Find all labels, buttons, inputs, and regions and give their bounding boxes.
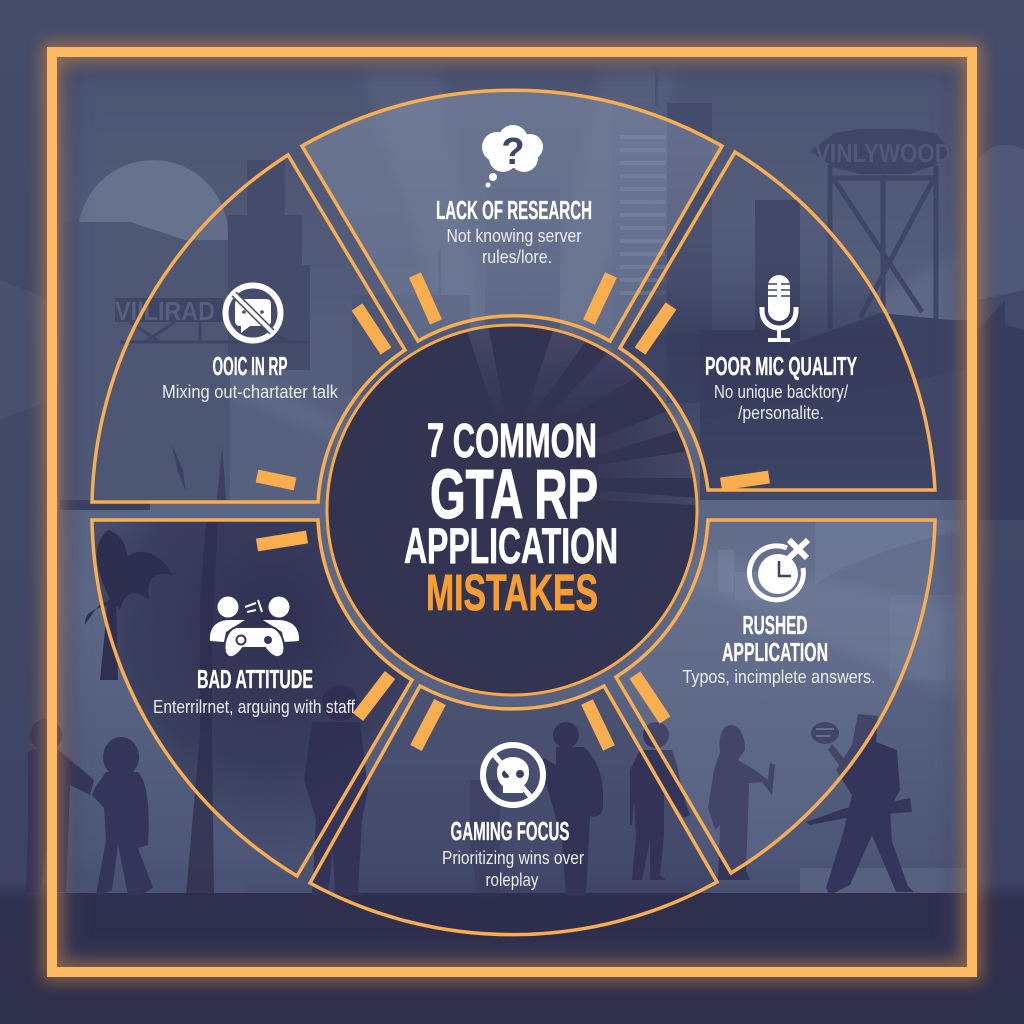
inner vignette xyxy=(57,57,967,967)
icon: question cloud xyxy=(482,125,543,188)
icon: microphone xyxy=(762,275,796,341)
description xyxy=(714,382,848,423)
panel: poor mic quality xyxy=(620,152,935,490)
person: backpack xyxy=(538,722,603,895)
left billboard: VIILIRAD xyxy=(115,296,215,326)
heading: OOIC IN RP xyxy=(212,351,288,381)
panel: ooic in rp xyxy=(92,155,405,502)
icon: clock with x xyxy=(749,540,808,600)
left billboard xyxy=(115,298,286,344)
heading: BAD ATTITUDE xyxy=(197,664,313,694)
title: MISTAKES xyxy=(426,564,598,621)
person: child xyxy=(92,737,153,895)
building right xyxy=(755,200,800,340)
description: Enterrilrnet, arguing with staff xyxy=(153,697,356,717)
tower xyxy=(620,76,712,403)
right lower scenery xyxy=(718,520,950,574)
palm trees xyxy=(85,530,172,680)
hill behind sun xyxy=(60,222,230,500)
segment: ooic in rp xyxy=(162,286,339,402)
person: figure behind skull xyxy=(470,780,500,897)
title xyxy=(404,414,618,621)
street lamp xyxy=(186,520,218,895)
hills right xyxy=(700,313,967,500)
description xyxy=(446,226,582,267)
center circle xyxy=(327,325,697,695)
heading: APPLICATION xyxy=(722,637,828,667)
vinewood sign xyxy=(810,129,952,330)
speech bubble xyxy=(811,722,852,774)
panels xyxy=(92,90,935,935)
description: roleplay xyxy=(486,870,538,890)
heading: GAMING FOCUS xyxy=(450,816,570,846)
segment: lack of research xyxy=(436,125,592,267)
icon: question cloud: ? xyxy=(501,131,525,173)
person: far left xyxy=(26,719,94,892)
panel: bad attitude xyxy=(92,520,412,876)
rays inside circle xyxy=(465,325,696,505)
icon: no chat xyxy=(226,286,280,340)
stepped tower left xyxy=(228,160,310,370)
title: 7 COMMON xyxy=(427,414,597,468)
person: microphone xyxy=(708,725,775,880)
icon: no skull xyxy=(483,745,543,805)
outside scenery xyxy=(0,145,1024,420)
title: GTA RP xyxy=(430,455,598,533)
sun disc xyxy=(79,160,228,240)
lower left city xyxy=(60,445,226,510)
person: woman walking xyxy=(630,722,690,880)
description: No unique backtory/ xyxy=(714,382,848,402)
description: Typos, incimplete answers. xyxy=(682,667,876,687)
tick marks xyxy=(257,275,769,748)
segment: gaming focus xyxy=(442,745,584,890)
heading xyxy=(722,610,828,667)
heading: POOR MIC QUALITY xyxy=(705,351,857,381)
skyline far xyxy=(352,252,560,395)
panel: gaming focus xyxy=(310,686,717,935)
title: APPLICATION xyxy=(404,518,618,574)
description xyxy=(442,848,584,890)
description: Mixing out-chartater talk xyxy=(162,382,339,402)
silhouettes xyxy=(26,685,914,897)
heading: RUSHED xyxy=(742,610,808,640)
segment: poor mic quality xyxy=(705,275,857,423)
description: /personalite. xyxy=(738,403,824,423)
panel: lack of research xyxy=(302,90,722,341)
heading: LACK OF RESEARCH xyxy=(436,195,592,225)
ground xyxy=(57,893,967,967)
person: dark man xyxy=(304,685,368,895)
light rays xyxy=(372,80,943,328)
person: rifle xyxy=(806,714,914,895)
icon: gamers with controller xyxy=(210,596,299,657)
description: Not knowing server xyxy=(446,226,582,246)
segment: rushed application xyxy=(682,540,876,687)
description: Prioritizing wins over xyxy=(442,848,584,868)
segment: bad attitude xyxy=(153,596,356,717)
description: rules/lore. xyxy=(482,247,552,267)
vinewood sign: VINLYWOOD xyxy=(815,138,951,168)
panel: rushed application xyxy=(616,520,935,873)
